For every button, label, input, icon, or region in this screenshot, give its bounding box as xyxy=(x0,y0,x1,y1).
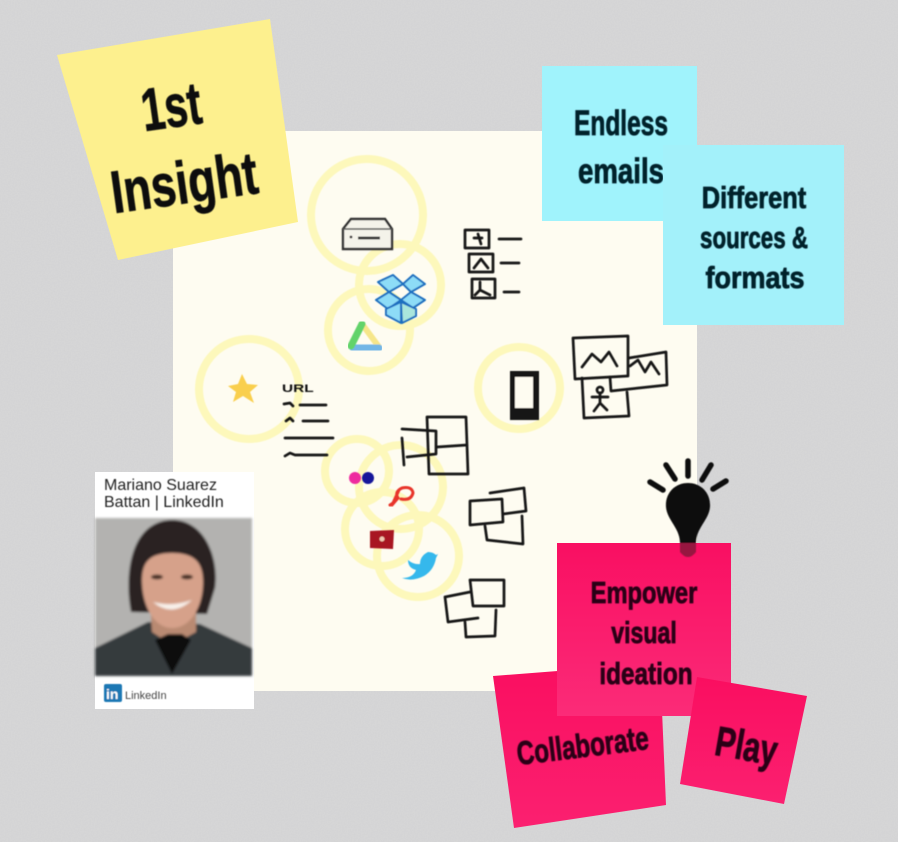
note: Play: Play xyxy=(712,717,782,775)
note: Different sources and formats: sources & xyxy=(700,220,808,255)
sketch: photo list xyxy=(465,230,521,298)
icon: flickr dots xyxy=(349,472,374,484)
note: 1st Insight xyxy=(57,19,298,260)
logo: LinkedIn: LinkedIn xyxy=(125,690,167,702)
icon: star xyxy=(228,374,258,403)
sketch: pictures group xyxy=(573,336,667,418)
sketch: URL list xyxy=(282,382,333,456)
card name text xyxy=(104,477,224,511)
note: Different sources and formats xyxy=(663,145,844,325)
icon: light bulb xyxy=(650,461,726,557)
sketch: URL list: URL xyxy=(282,382,314,394)
icon: dropbox box xyxy=(376,275,425,323)
logo: LinkedIn xyxy=(104,684,167,702)
diagram: yellow source circles xyxy=(199,159,560,597)
note: Different sources and formats: Different xyxy=(702,181,807,216)
note: Empower visual ideation: visual xyxy=(611,615,677,650)
note: 1st Insight: Insight xyxy=(107,140,262,227)
logo: LinkedIn: in xyxy=(106,686,118,702)
note: 1st Insight: 1st xyxy=(137,69,205,144)
note: Empower visual ideation xyxy=(557,543,731,716)
note: Empower visual ideation: Empower xyxy=(591,575,698,610)
icon: twitter bird xyxy=(402,552,438,580)
icon: pinterest P xyxy=(390,488,413,505)
sketch: upper file stack xyxy=(402,417,468,474)
photo: portrait xyxy=(95,518,252,676)
sketch: middle file stack xyxy=(470,488,526,544)
sketch: lower file stack xyxy=(445,580,504,637)
panel: cream board xyxy=(173,131,697,691)
icon: google drive triangle xyxy=(351,324,379,348)
card name text: Battan | LinkedIn xyxy=(104,494,224,511)
note: Endless emails: Endless xyxy=(574,105,668,143)
card: LinkedIn profile xyxy=(95,472,254,709)
note: Different sources and formats: formats xyxy=(706,261,804,295)
icon: storage drive xyxy=(343,219,392,249)
card name text: Mariano Suarez xyxy=(104,477,217,494)
note: Endless emails: emails xyxy=(578,151,664,191)
note: Collaborate: Collaborate xyxy=(515,721,651,773)
note: Play xyxy=(680,677,807,804)
note: Endless emails xyxy=(542,66,697,221)
note: Collaborate xyxy=(493,663,666,828)
icon: phone xyxy=(510,371,539,420)
icon: film strip xyxy=(370,530,394,549)
note: Empower visual ideation: ideation xyxy=(599,656,693,691)
